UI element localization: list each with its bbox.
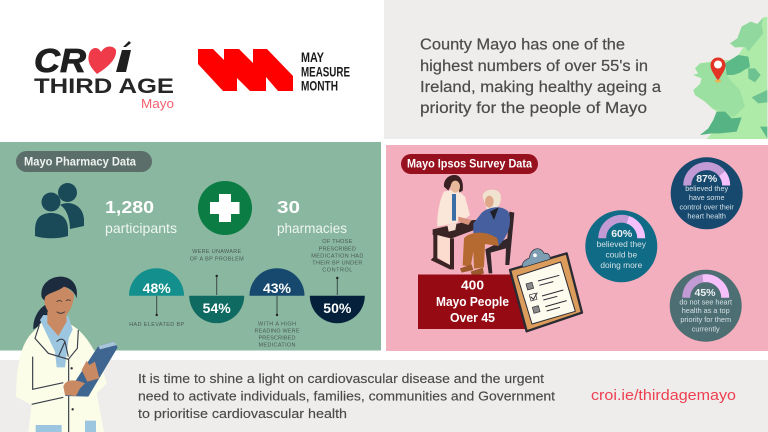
stat: 50 percent under control: PRESCRIBED (319, 246, 356, 252)
logo: May Measure Month (198, 49, 350, 94)
stat: 50 percent under control (310, 239, 365, 323)
stat: 60 percent: doing more (600, 260, 643, 270)
text: county Mayo statement: priority for the people of Mayo (420, 100, 647, 117)
text: call to action: need to activate individuals, families, communities and Government (138, 388, 555, 404)
stat: 43 percent prescribed: PRESCRIBED (258, 336, 296, 342)
stat: 60 percent: 60% (611, 228, 633, 240)
logo: May Measure Month: MEASURE (301, 64, 350, 80)
icon: pharmacy cross (198, 181, 252, 235)
heading: Mayo Ipsos Survey Data: Mayo Ipsos Survey Data (407, 158, 533, 170)
stat: participants (105, 197, 177, 236)
logo: May Measure Month: MONTH (301, 78, 338, 94)
stat: 43 percent prescribed (250, 268, 304, 348)
stat: 48 percent elevated BP: 48% (143, 280, 171, 296)
icon: map pin (710, 58, 726, 82)
stat: 43 percent prescribed: MEDICATION (258, 342, 296, 348)
text: call to action: to prioritise cardiovascular health (138, 406, 347, 421)
logo: Croi Third Age Mayo: THIRD AGE (34, 75, 174, 98)
panel: Mayo Ipsos Survey Data (386, 145, 768, 351)
panel: call to action (0, 360, 768, 432)
stat: 50 percent under control: MEDICATION HAD (311, 254, 363, 260)
stat: 87 percent: control over their (680, 202, 734, 211)
panel: Mayo Pharmacy Data (0, 142, 381, 350)
stat: 43 percent prescribed: 43% (263, 280, 292, 296)
stat: pharmacies: 30 (277, 197, 300, 217)
stat: 45 percent: currently (692, 324, 720, 334)
stat: 45 percent: 45% (694, 287, 716, 299)
text: call to action: It is time to shine a light on cardiovascular disease and the urgent (138, 371, 544, 386)
heading: Mayo Pharmacy Data (16, 151, 152, 172)
icon: people (35, 183, 84, 238)
stat: 54 percent unaware: 54% (203, 300, 231, 316)
stat: 50 percent under control: 50% (323, 300, 352, 316)
logo: Croi Third Age Mayo: Mayo (141, 96, 174, 111)
stat: pharmacies (277, 197, 347, 236)
link: croi.ie/thirdagemayo: croi.ie/thirdagemayo (591, 388, 736, 404)
stat: 87 percent: 87% (696, 173, 718, 185)
stat: 54 percent unaware: OF A BP PROBLEM (190, 256, 244, 262)
map of Ireland (693, 17, 767, 139)
stat: 60 percent (585, 210, 657, 282)
stat: participants: participants (105, 220, 177, 236)
heading: Mayo Pharmacy Data: Mayo Pharmacy Data (24, 156, 137, 168)
logo: May Measure Month: MAY (301, 49, 325, 65)
illustration: pharmacist with folder (16, 277, 118, 432)
stat: 60 percent: could be (605, 250, 637, 260)
logo: Croi Third Age Mayo: CR (34, 42, 86, 79)
text: county Mayo statement: highest numbers of over 55's in (420, 58, 648, 75)
callout: 400 Mayo People Over 45: Mayo People (436, 294, 509, 309)
callout: 400 Mayo People Over 45: Over 45 (450, 310, 495, 325)
stat: 43 percent prescribed: WITH A HIGH (258, 322, 296, 328)
panel: logos (0, 0, 384, 139)
stat: 87 percent: heart health (687, 211, 726, 220)
callout: 400 Mayo People Over 45: 400 (461, 278, 484, 292)
callout: 400 Mayo People Over 45 (418, 274, 530, 329)
stat: 50 percent under control: OF THOSE (322, 239, 353, 245)
stat: 43 percent prescribed: READING WERE (254, 328, 300, 334)
stat: 54 percent unaware: WERE UNAWARE (192, 249, 242, 255)
stat: 87 percent: have some (689, 193, 725, 202)
stat: 50 percent under control: THEIR BP UNDER (312, 261, 362, 267)
heading: Mayo Ipsos Survey Data (401, 154, 538, 174)
panel: county Mayo statement (384, 0, 768, 139)
stat: 54 percent unaware (189, 249, 244, 323)
stat: participants: 1,280 (105, 197, 154, 217)
stat: 48 percent elevated BP (129, 268, 185, 328)
icon: clipboard checklist (510, 249, 582, 331)
stat: 45 percent: health as a top (682, 306, 730, 315)
stat: 45 percent: priority for them (680, 315, 731, 324)
text: county Mayo statement: Ireland, making healthy ageing a (420, 79, 661, 96)
stat: 45 percent: do not see heart (679, 298, 732, 306)
text: county Mayo statement: County Mayo has one of the (420, 36, 625, 54)
stat: pharmacies: pharmacies (277, 220, 347, 236)
illustration: blood pressure check (431, 175, 514, 277)
stat: 48 percent elevated BP: HAD ELEVATED BP (129, 322, 185, 328)
stat: 87 percent: believed they (685, 184, 729, 193)
stat: 50 percent under control: CONTROL (322, 268, 352, 274)
logo: Croi Third Age Mayo (34, 41, 174, 111)
text: county Mayo statement (420, 36, 661, 117)
stat: 60 percent: believed they (597, 239, 647, 249)
stat: 87 percent (671, 157, 743, 229)
text: call to action (138, 371, 555, 421)
stat: 45 percent (670, 270, 742, 342)
